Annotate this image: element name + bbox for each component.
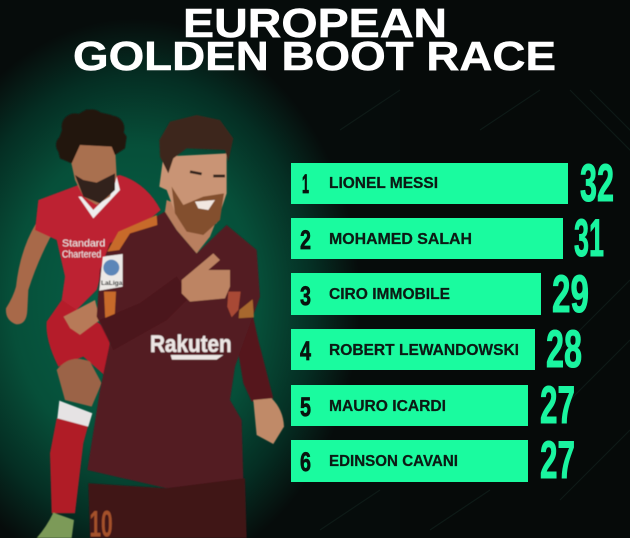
row 6: EDINSON CAVANI [329, 453, 458, 470]
row 6 [291, 431, 575, 490]
Messi face [159, 153, 227, 233]
player: Lionel Messi [63, 115, 284, 538]
Salah thigh [57, 359, 102, 407]
row 4: 4 [300, 336, 311, 366]
Salah jersey [35, 175, 161, 310]
Messi sleeve badge [99, 254, 123, 291]
Messi sleeve and pointing hand [100, 277, 190, 350]
Messi sponsor: Rakuten [150, 331, 232, 358]
Salah shorts [46, 300, 110, 380]
row 3: 29 [552, 265, 589, 324]
player: Mohamed Salah: Chartered [62, 250, 101, 261]
row 4: 28 [546, 320, 582, 379]
row 4: ROBERT LEWANDOWSKI [329, 342, 519, 359]
row 3: CIRO IMMOBILE [329, 286, 450, 303]
row 6: 6 [300, 447, 311, 477]
Messi shoulder stripe [107, 215, 157, 252]
Salah boot [37, 513, 74, 538]
Messi right arm [233, 310, 273, 402]
Messi hair [159, 115, 233, 173]
row 5 [291, 376, 575, 435]
Salah hair [56, 109, 127, 163]
Salah arm [6, 223, 51, 324]
Messi left hand [63, 300, 100, 335]
row 3 [291, 265, 589, 324]
Messi shirt [87, 212, 260, 488]
Messi shorts [88, 478, 247, 538]
title: EUROPEAN [183, 0, 447, 46]
Messi neck [165, 200, 217, 253]
Salah neck and face [71, 145, 117, 205]
player: Lionel Messi: LaLiga [101, 280, 123, 287]
row 1: 1 [302, 169, 309, 199]
Messi crest [227, 292, 241, 317]
row 5: 27 [540, 376, 575, 435]
row 2 [291, 209, 604, 268]
row 1: LIONEL MESSI [329, 175, 438, 192]
row 5: 5 [300, 392, 311, 422]
title [73, 0, 556, 79]
row 4 [291, 320, 582, 379]
player: Mohamed Salah [6, 109, 161, 538]
leaderboard [291, 154, 614, 490]
Salah sponsor: Standard [62, 239, 105, 250]
row 2: MOHAMED SALAH [329, 231, 472, 248]
row 5: MAURO ICARDI [329, 398, 446, 415]
row 1 [291, 154, 614, 213]
row 2: 2 [300, 225, 311, 255]
Salah sock [50, 418, 88, 513]
row 3: 3 [300, 281, 311, 311]
row 6: 27 [540, 431, 575, 490]
title: GOLDEN BOOT RACE [73, 33, 556, 79]
